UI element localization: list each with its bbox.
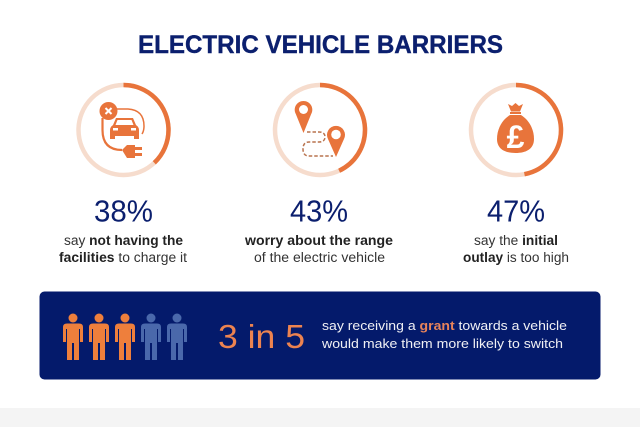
- description line 2: outlay: outlay is too high: [463, 250, 569, 265]
- panel: grant callout: [40, 292, 600, 380]
- description: outlay: say the initial: [474, 233, 558, 248]
- description: range: worry about the range: [244, 233, 394, 248]
- icon: five people, three highlighted: [63, 314, 187, 360]
- icon: car with charging plug: [100, 102, 144, 158]
- callout text line 1: say receiving a grant towards a vehicle: [322, 319, 567, 333]
- panel: charging barrier: [59, 85, 187, 265]
- callout text line 2: would make them more likely to switch: [321, 337, 563, 351]
- description: facilities: say not having the: [64, 233, 183, 248]
- stat: 47%: 47%: [487, 194, 545, 228]
- stat: 43%: 43%: [290, 194, 348, 228]
- description line 2: facilities: facilities to charge it: [59, 250, 187, 265]
- panel: range barrier: [244, 85, 394, 265]
- stat: 38%: 38%: [94, 194, 153, 228]
- icon: money bag with pound sign: [497, 103, 534, 155]
- ring chart: 43%: [275, 85, 365, 175]
- ring chart: 38%: [78, 85, 168, 175]
- description line 2: range: of the electric vehicle: [254, 250, 385, 265]
- icon: money bag with pound sign: £: [507, 119, 525, 155]
- callout background: [40, 292, 600, 380]
- title: ELECTRIC VEHICLE BARRIERS: [138, 31, 503, 59]
- stat: 3 in 5: 3 in 5: [218, 318, 305, 355]
- icon: route with map pins: [295, 101, 345, 157]
- panel: cost barrier: [463, 85, 569, 265]
- ring chart: 47%: [471, 85, 561, 175]
